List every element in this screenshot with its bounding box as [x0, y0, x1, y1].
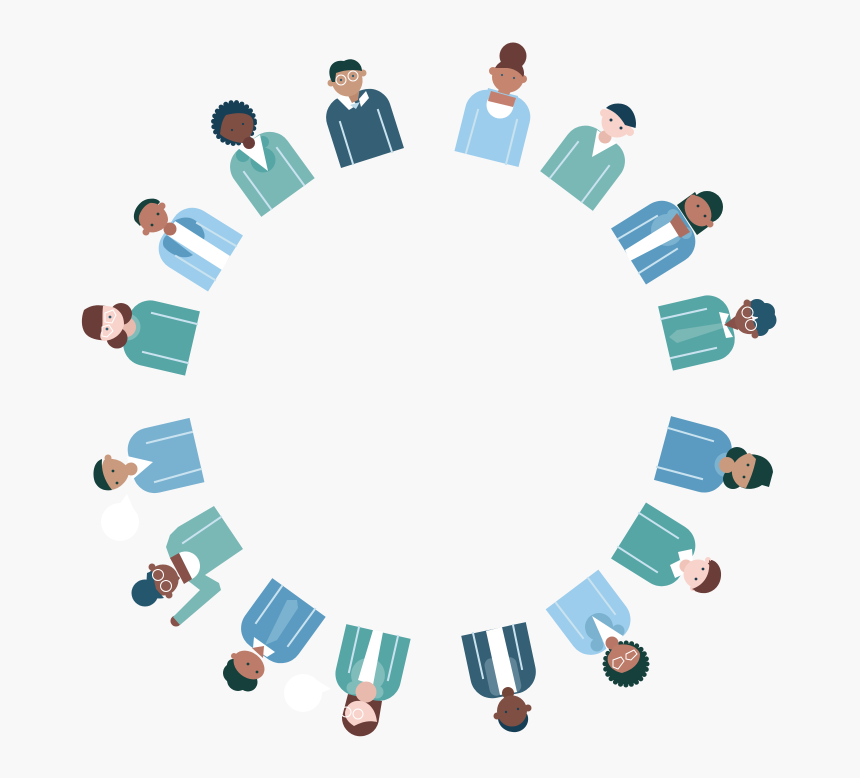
shoulder patches [236, 136, 276, 172]
person: man in light blue with white shirt [134, 199, 243, 291]
person: man in teal with tie and glasses [658, 291, 776, 371]
eyes [697, 205, 706, 217]
torso [546, 570, 639, 664]
torso [123, 418, 204, 497]
collar [670, 549, 693, 578]
head [102, 454, 129, 490]
person: man in pale blue [94, 418, 204, 497]
hair [134, 199, 160, 226]
white collar [719, 312, 733, 338]
sleeve stripes [349, 627, 398, 680]
sleeve stripes [176, 223, 236, 280]
torso [150, 199, 243, 291]
hair [748, 299, 776, 336]
white shirt [167, 221, 230, 270]
torso [611, 192, 704, 284]
hair [692, 560, 721, 593]
head [228, 645, 270, 685]
torso [454, 85, 535, 167]
speech bubble: left [101, 494, 139, 541]
lapels [163, 218, 205, 257]
sleeve stripes [618, 216, 677, 273]
torso [540, 117, 634, 211]
shoulder highlights [651, 209, 692, 246]
person: man in navy sweater with glasses [320, 59, 404, 168]
torso with arm [166, 506, 243, 625]
head [327, 60, 367, 100]
V collar [238, 135, 268, 171]
white shirt [358, 630, 383, 685]
curly hair [605, 643, 647, 685]
sleeve stripes [466, 110, 517, 164]
white shirt [592, 616, 623, 650]
torso [654, 416, 737, 497]
sleeve stripes [657, 428, 713, 479]
eyes [247, 663, 258, 673]
head [100, 306, 124, 341]
hand [170, 616, 182, 626]
neck [606, 636, 618, 650]
hair back [342, 694, 382, 736]
neck [502, 687, 514, 699]
person: woman with curly hair in teal [214, 102, 315, 217]
hair [82, 303, 132, 348]
eyes [106, 316, 111, 330]
head [679, 191, 717, 231]
neck [164, 222, 176, 236]
person: man in blue with tie [223, 578, 326, 692]
head [732, 453, 756, 488]
hair [606, 104, 636, 128]
neck [719, 457, 735, 473]
glasses [613, 650, 637, 669]
torso [658, 291, 739, 371]
sleeve stripes [618, 513, 678, 572]
eyes [695, 568, 704, 580]
eyes [743, 464, 749, 478]
hair [223, 659, 258, 692]
eyes [231, 123, 244, 131]
hair bun [132, 580, 158, 606]
hair fringe [692, 560, 715, 591]
torso [331, 624, 411, 705]
sleeve stripes [473, 625, 522, 678]
person: man in teal sweater [540, 104, 636, 211]
shirt gap [350, 102, 360, 109]
white shirt [486, 627, 517, 695]
person: woman with curly hair and glasses in light blue [546, 570, 647, 685]
white shirt [625, 222, 680, 261]
head [148, 564, 178, 598]
neckline [486, 92, 514, 118]
neck [116, 317, 136, 337]
sleeve stripes [244, 148, 304, 209]
V collar [592, 130, 617, 157]
hair [94, 459, 112, 490]
neck [356, 682, 376, 702]
sleeve stripes [143, 313, 197, 363]
eyes [501, 74, 515, 79]
neck circle [114, 314, 140, 340]
hair [146, 571, 164, 599]
sleeve stripes [550, 142, 609, 202]
eyes [112, 470, 118, 484]
person: woman in blue jacket with long hair [611, 191, 723, 284]
head [494, 696, 532, 726]
neck [680, 560, 692, 572]
collar band [170, 553, 192, 584]
neck [243, 137, 255, 149]
glasses [742, 307, 756, 330]
head [345, 701, 377, 726]
neck circle [714, 452, 740, 478]
neck [724, 315, 738, 330]
head [489, 62, 527, 95]
sleeve stripes [256, 586, 315, 646]
neck [598, 130, 612, 144]
person: woman in teal with white glasses [82, 296, 200, 376]
neck [345, 87, 360, 103]
neck [252, 646, 264, 658]
person: woman in blue with dark hair [654, 416, 773, 497]
shoulder highlights [346, 658, 385, 698]
hair bun [500, 42, 526, 70]
neckline [179, 551, 200, 579]
head [735, 300, 758, 338]
glasses [152, 570, 172, 592]
tie [265, 600, 298, 645]
collar [337, 91, 369, 110]
neck [670, 213, 690, 238]
tie [669, 323, 723, 343]
collar band [488, 91, 516, 107]
neck [124, 462, 138, 476]
glasses [336, 71, 358, 85]
hair [723, 447, 773, 489]
sleeve stripes [661, 309, 716, 358]
long hair [677, 191, 723, 235]
person: man in teal with brown hair [611, 503, 721, 595]
curly hair [214, 102, 254, 144]
torso [221, 123, 315, 217]
person: man in navy with white stripe [461, 622, 540, 732]
eyes [610, 118, 622, 130]
sleeve stripe [183, 517, 221, 543]
hair [329, 59, 362, 82]
torso [232, 578, 326, 672]
torso [320, 83, 404, 168]
hair [498, 714, 528, 732]
torso [611, 503, 704, 595]
head [608, 644, 640, 673]
eyes [151, 213, 159, 226]
jacket highlights [483, 656, 523, 697]
white collar [127, 456, 153, 480]
eyes [505, 708, 519, 713]
torso [461, 622, 540, 702]
person: woman in teal with glasses [331, 624, 411, 736]
glasses [102, 310, 116, 337]
sleeve stripes [147, 432, 201, 482]
sleeve stripes [556, 578, 615, 638]
hair [495, 59, 524, 77]
neck [167, 570, 180, 585]
head [600, 106, 634, 138]
person: woman with hair bun in light blue [454, 42, 535, 167]
sleeve stripes [340, 110, 392, 164]
torso [119, 296, 200, 376]
head [139, 202, 168, 236]
head [684, 557, 712, 591]
eyes [340, 75, 354, 81]
shoulder patches [585, 613, 624, 652]
speech bubble: bottom [284, 674, 331, 712]
head [220, 113, 253, 143]
white collar [253, 637, 275, 657]
glasses [341, 707, 363, 719]
person: woman in teal with raised arm [132, 506, 243, 626]
